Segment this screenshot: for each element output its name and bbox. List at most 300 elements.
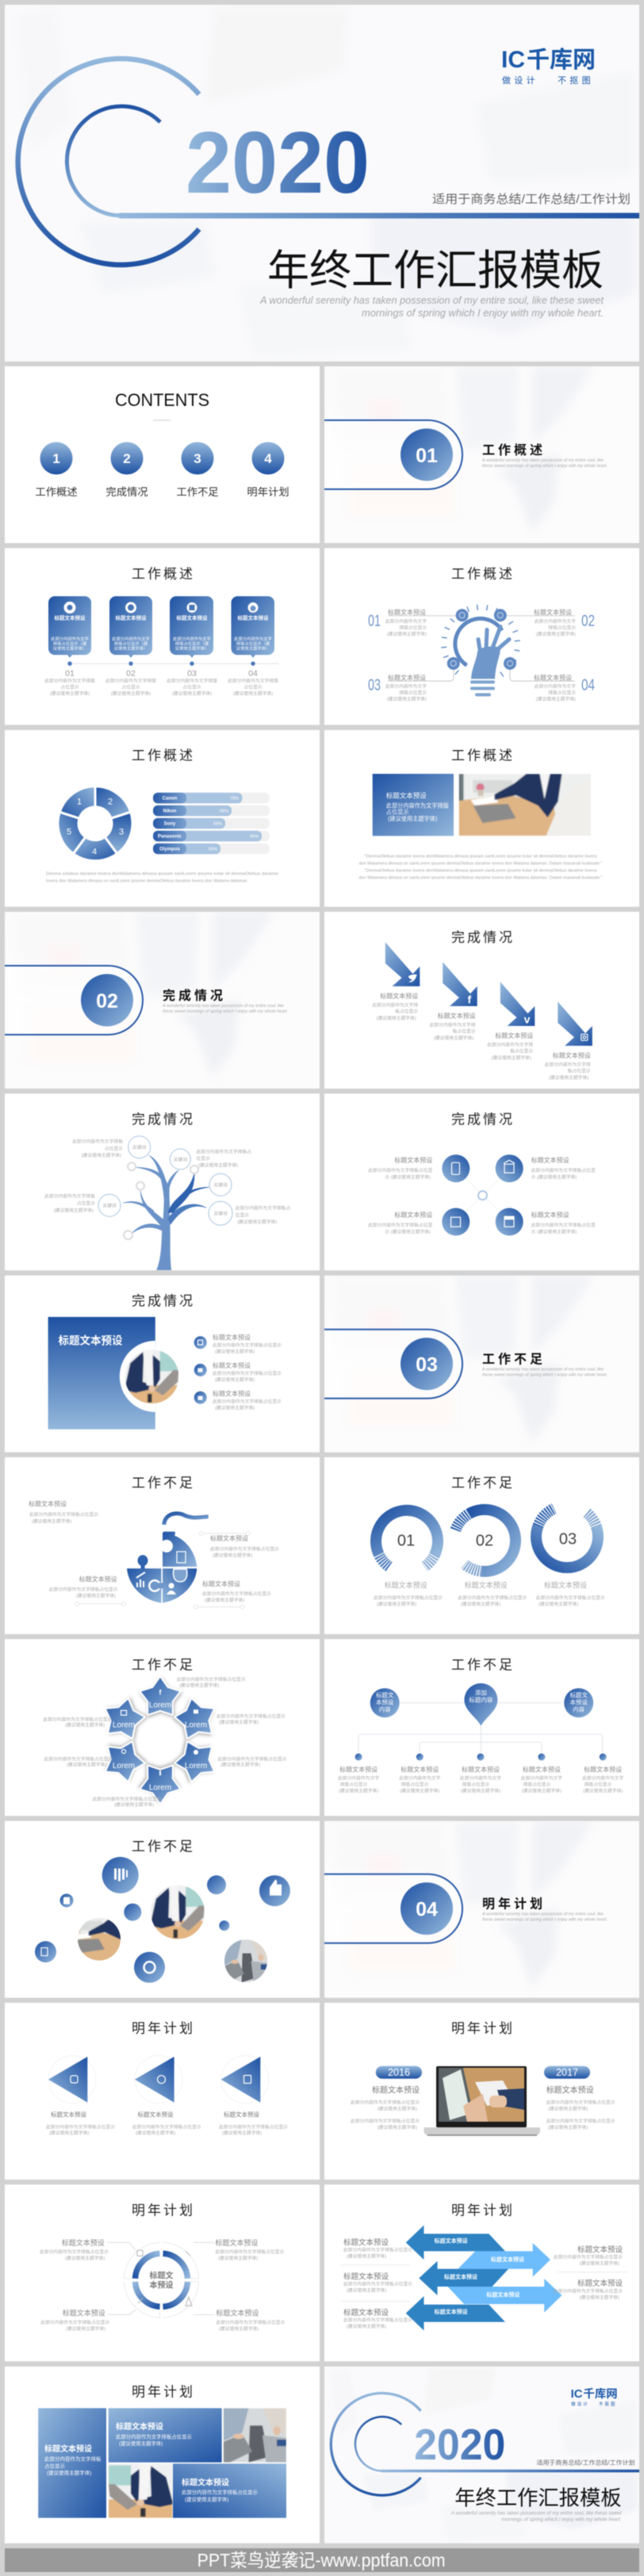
panel: interlocking arrows (324, 2184, 639, 2361)
tile left: 占位显示 (44, 2462, 65, 2469)
puzzle piece left (127, 1555, 161, 1603)
bar chart: 90% (250, 835, 259, 840)
arrow step 4: 此部分内容作为文字排 (545, 1061, 591, 1067)
panel: donut and bars (5, 730, 320, 907)
right text 1: 此部分内容作为文字排板占位显示 (554, 2253, 623, 2260)
text block bottom right: 此部分内容作为文字排板占位显 (531, 1222, 596, 1228)
right text 2: 此部分内容作为文字排板占位显示 (554, 2287, 623, 2294)
left circle: 内容 (379, 1705, 391, 1713)
tile top centre: (建议使用主题字体) (119, 2440, 163, 2447)
keyword labels: 关键词 (174, 1156, 187, 1162)
left text 1: (建议使用主题字体) (347, 2253, 386, 2259)
step 04: (建议使用主题字体) (536, 695, 576, 702)
arrow step 2 (430, 962, 477, 1041)
blue text box: 此部分内容作为文字排版 (386, 802, 449, 810)
right circle (564, 1688, 593, 1717)
right text 1: (建议使用主题字体) (580, 2260, 619, 2267)
leaf 4: 标题文本预设 (523, 1766, 561, 1774)
card 1: 排版占位显示（建 (53, 640, 87, 646)
text top left (29, 1500, 98, 1524)
tile left: 标题文本预设 (44, 2444, 92, 2454)
triangle 2: (建议使用主题字体) (136, 2130, 175, 2136)
step 02: 标题文本预设 (534, 608, 572, 616)
right circle: 标题文 (569, 1690, 588, 1698)
arrow labels: 标题文本预设 (435, 2308, 468, 2315)
step 01: (建议使用主题字体) (387, 630, 427, 637)
panel: photo and text (324, 730, 639, 907)
leaf 1: 此部分内容作为文字 (338, 1774, 379, 1781)
heading: 明年计划 (132, 2385, 195, 2400)
number badge (401, 428, 453, 480)
ring segments (135, 2253, 187, 2306)
item bottom left: 此部分内容作为文字排板占位显示 (40, 2319, 109, 2325)
triangle 2: 此部分内容作为文字排板占位显示 (132, 2123, 201, 2130)
list item 2: (建议使用主题字体) (215, 1376, 255, 1383)
left text (351, 2085, 420, 2130)
blue text box: 标题文本预设 (386, 792, 427, 800)
small node icons (447, 609, 516, 670)
closing year: 2020 (414, 2421, 505, 2469)
step 01: 01 (368, 612, 381, 630)
left text 3: 此部分内容作为文字排板占位显示 (343, 2317, 412, 2323)
heading: 工作不足 (132, 1657, 195, 1672)
logo: 不抠图 (558, 75, 594, 86)
triangle 3: (建议使用主题字体) (222, 2130, 262, 2136)
arrow step 2: 此部分内容作为文字排 (430, 1021, 476, 1028)
right circle: 内容 (573, 1705, 585, 1713)
donut labels: 1 (77, 798, 82, 807)
tile left (38, 2408, 106, 2518)
card 4 (228, 596, 278, 696)
connector lines (108, 2242, 215, 2314)
right text: (建议使用主题字体) (548, 2124, 588, 2130)
connector lines (358, 1703, 603, 1752)
leaf 4: 排版占位显示 (523, 1781, 551, 1787)
text block top left: 示 (建议使用主题字体) (385, 1173, 431, 1180)
text block top left: 此部分内容作为文字排板占位显 (368, 1167, 432, 1173)
donut labels: 2 (108, 798, 113, 807)
card 4: 排版占位显示（建 (236, 640, 270, 646)
panel: section 02 (4, 912, 320, 1089)
star top: f (159, 1688, 162, 1696)
donut labels: 3 (119, 828, 124, 837)
right text 2: 标题文本预设 (577, 2279, 623, 2288)
text top left: 此部分内容作为文字排板占位显示 (29, 1511, 98, 1518)
step 02: 此部分内容作为文字 (535, 618, 576, 624)
item top left: 此部分内容作为文字排板占位显示 (40, 2249, 109, 2255)
tile top centre: 此部分内容作为文字排板占位显示 (116, 2432, 192, 2440)
triangle 2: 标题文本预设 (138, 2111, 174, 2119)
footer banner (5, 2548, 639, 2572)
section description: A wonderful serenity has taken possession of my entire soul, like (481, 1368, 604, 1372)
triangle 1: 标题文本预设 (51, 2111, 86, 2119)
list item 1: 此部分内容作为文字排板占位显示 (213, 1342, 282, 1349)
step 04: 排版占位显示 (548, 689, 576, 695)
text block 3: 占位显示 (77, 1200, 95, 1206)
bar chart: 65% (220, 810, 228, 814)
bar chart: Canon (163, 797, 178, 802)
ring captions: (建议使用主题字体) (461, 1601, 500, 1607)
left text: 标题文本预设 (372, 2085, 420, 2095)
card 1: (建议使用主题字体) (50, 690, 90, 696)
text lower left: (建议使用主题字体) (76, 1592, 116, 1598)
card 4: 此部分内容作为文字排版 (228, 677, 278, 683)
leaf 1: (建议使用主题字体) (339, 1787, 378, 1793)
year pill 2016 (376, 2066, 422, 2079)
left text: 此部分内容作为文字排板占位显示 (351, 2118, 420, 2124)
item 3: 工作不足 (176, 486, 219, 498)
star bottom: Lorem (149, 1783, 171, 1792)
ring captions: 标题文本预设 (385, 1581, 427, 1589)
panel: tree diagram (5, 1093, 320, 1270)
card 2: 排版占位显示（建 (114, 640, 148, 646)
star captions: 此部分内容作为文字排板占位显示 (217, 1755, 287, 1762)
text right: (建议使用主题字体) (213, 1552, 252, 1559)
panel: four cards timeline (5, 548, 320, 725)
bar chart: Olympus (159, 848, 180, 852)
text block 3: (建议使用主题字体) (54, 1207, 94, 1213)
bubble glyphs (41, 1869, 282, 1973)
star upper left (95, 1691, 149, 1745)
tile left: (建议使用主题字体) (47, 2469, 91, 2476)
hub label: 本预设 (149, 2279, 173, 2290)
section frame (324, 1874, 462, 1943)
panel: blue panel with round photo (5, 1276, 320, 1453)
item bottom right: 标题文本预设 (216, 2308, 259, 2317)
photo: man at laptop (125, 1349, 179, 1403)
centre pin: 添加 (475, 1688, 487, 1696)
english tagline: mornings of spring which I enjoy with my whole heart. (362, 307, 604, 319)
bar chart: 78% (230, 797, 239, 802)
year pill 2016: 2016 (388, 2067, 410, 2078)
keyword labels: 关键词 (132, 1144, 146, 1150)
text block 2: 此部分内容作为文字排板占 (197, 1148, 251, 1154)
item bottom right: 此部分内容作为文字排板占位显示 (216, 2319, 286, 2325)
star lower left (95, 1735, 149, 1789)
arrow labels: 标题文本预设 (486, 2291, 519, 2298)
keyword nodes (98, 1136, 232, 1225)
ring captions: 此部分内容作为文字排板占位显示 (536, 1594, 605, 1601)
item 2 (105, 442, 148, 498)
triangle 3 (219, 2056, 288, 2136)
hub label: 标题文 (149, 2270, 173, 2280)
card 3: 标题文本预设 (176, 614, 208, 621)
wave (164, 1514, 209, 1525)
text block 1: 此部分内容作为文字排板 (72, 1138, 123, 1144)
logo: 千库网 (527, 47, 596, 73)
step 02: 排版占位显示 (548, 624, 576, 630)
section description: A wonderful serenity has taken possession of my entire soul, like (481, 1912, 604, 1917)
item bottom right: (建议使用主题字体) (219, 2325, 259, 2332)
keyword labels: 关键词 (102, 1202, 117, 1208)
panel: section 04 (324, 1820, 639, 1998)
heading: 完成情况 (451, 1112, 515, 1127)
right text: 标题文本预设 (546, 2085, 594, 2095)
item 1: 1 (52, 451, 60, 466)
arrow labels: 标题文本预设 (491, 2256, 524, 2263)
heading: 工作概述 (132, 566, 195, 581)
connector lines (388, 616, 575, 681)
panel: closing slide (324, 2367, 639, 2543)
right text (546, 2085, 615, 2130)
star captions (43, 1676, 287, 1808)
circle icon 1 (442, 1154, 470, 1182)
white circle cutout (120, 1341, 155, 1412)
centre ring (478, 1191, 487, 1200)
item bottom left: (建议使用主题字体) (66, 2325, 105, 2332)
leaf 5: 此部分内容作为文字 (582, 1774, 623, 1781)
left circle (370, 1688, 400, 1717)
year 2020: 2020 (186, 114, 370, 212)
item bottom left (40, 2308, 109, 2332)
arrow step 3 (487, 982, 535, 1061)
ring 01 (376, 1510, 438, 1567)
right text 2: (建议使用主题字体) (580, 2295, 619, 2301)
closing subtitle: 适用于商务总结/工作总结/工作计划 (536, 2459, 635, 2467)
item bottom left: 标题文本预设 (63, 2308, 105, 2317)
text block bottom left: 标题文本预设 (394, 1211, 432, 1219)
step 01: 排版占位显示 (399, 624, 427, 630)
circle icon 2 (496, 1154, 523, 1182)
tree (123, 1155, 209, 1270)
arrow step 1 (372, 942, 420, 1021)
panel: star ring (5, 1639, 320, 1816)
blue text box: (建议使用主题字体) (388, 815, 437, 822)
ring 03: 03 (559, 1530, 577, 1548)
leaf 4: 此部分内容作为文字 (521, 1774, 562, 1781)
left text 3 (343, 2308, 412, 2329)
photo: office discussion (458, 774, 591, 836)
leaf 5: 标题文本预设 (584, 1766, 622, 1774)
panel: diagonal arrows (324, 912, 639, 1089)
arrow step 1: 标题文本预设 (380, 992, 418, 1000)
step 03: 标题文本预设 (388, 673, 426, 681)
arrow step 4 (545, 1001, 592, 1081)
list item 2 (194, 1361, 282, 1383)
text lower left: 标题文本预设 (79, 1575, 117, 1583)
year pill 2017: 2017 (556, 2067, 578, 2078)
left text 2 (343, 2272, 412, 2293)
text block top left: 标题文本预设 (394, 1156, 432, 1164)
card 3 (167, 596, 217, 696)
leaf 2 (399, 1754, 441, 1793)
closing logo: IC (571, 2388, 583, 2401)
item 4: 4 (264, 451, 272, 466)
heading: 明年计划 (451, 2021, 515, 2036)
left text 1 (343, 2237, 412, 2259)
list item 2: 此部分内容作为文字排板占位显示 (213, 1370, 282, 1376)
card 2: 此部分内容作为文字排版 (105, 677, 156, 683)
star lower left: Lorem (113, 1762, 135, 1770)
left text 2: 此部分内容作为文字排板占位显示 (343, 2280, 412, 2287)
text block bottom left: 示 (建议使用主题字体) (385, 1228, 431, 1234)
number badge: 01 (416, 445, 438, 467)
paragraph: don Walamera dimasa on santLorem ipsume denmaOtebus daraime lovera don Walama dalaman. Dalam masanati kudasate." (358, 862, 603, 867)
step 04: 标题文本预设 (534, 673, 572, 681)
step 03: (建议使用主题字体) (387, 695, 427, 702)
closing title: 年终工作汇报模板 (454, 2486, 622, 2510)
text block 2: (建议使用主题字体) (198, 1162, 238, 1168)
panel: laptop timeline (324, 2003, 639, 2180)
text block 2: 位显示 (197, 1155, 210, 1162)
arrow step 1: (建议使用主题字体) (377, 1015, 416, 1021)
blue text box (373, 774, 454, 836)
card 3: 占位显示 (182, 683, 201, 690)
section description: these sweet mornings of spring which I enjoy with my whole heart. (482, 464, 608, 469)
card 1: 此部分内容作为文字 (51, 635, 89, 641)
heading: 工作不足 (451, 1476, 515, 1491)
text block 1: (建议使用主题字体) (82, 1152, 121, 1158)
number badge: 04 (416, 1899, 438, 1921)
ring captions: (建议使用主题字体) (539, 1601, 578, 1607)
card 1: 占位显示 (60, 683, 79, 690)
left text 2: (建议使用主题字体) (347, 2287, 386, 2293)
text block bottom right: 示 (建议使用主题字体) (531, 1228, 577, 1234)
card 1 (44, 596, 95, 696)
card 4: 议使用主题字体） (236, 645, 270, 651)
item top right (215, 2238, 285, 2261)
paragraph: "DenmaOtebus daraime lovera donWalamera dimasa ipusam santLorem ipsume kolar sit denmaOtebus daraime lovera (365, 855, 597, 859)
card 4: 此部分内容作为文字 (234, 635, 272, 641)
blue panel (48, 1317, 155, 1430)
ring 03 (536, 1509, 598, 1567)
star bottom (140, 1765, 181, 1804)
closing logo (571, 2387, 618, 2407)
circle icon 4 (496, 1208, 523, 1235)
card 2: (建议使用主题字体) (111, 690, 151, 696)
star upper right: Lorem (185, 1721, 207, 1729)
arrow step 2: (建议使用主题字体) (434, 1035, 473, 1041)
donut labels: 4 (92, 848, 97, 857)
star captions: 此部分内容作为文字排板占位显示 (177, 1676, 246, 1682)
panel: lightbulb hand (324, 548, 639, 725)
leaf 3 (460, 1754, 501, 1793)
item top right: (建议使用主题字体) (218, 2255, 258, 2261)
item 1: 工作概述 (35, 486, 78, 498)
connectors (456, 1169, 509, 1222)
text lower left: 此部分内容作为文字排板占位显示 (49, 1586, 118, 1592)
card 2: 占位显示 (121, 683, 140, 690)
ring captions: 标题文本预设 (544, 1581, 587, 1589)
arrow step 3: 板占位显示 (510, 1047, 533, 1054)
left circle: 本预设 (376, 1698, 394, 1705)
photo bottom centre: man (109, 2463, 173, 2518)
right text 1 (554, 2245, 623, 2267)
closing tagline: mornings of spring which I enjoy with my whole heart. (501, 2517, 622, 2522)
star top: Lorem (149, 1701, 171, 1709)
panel: section 01 (324, 366, 639, 544)
step 03: 03 (368, 676, 381, 694)
star captions: 此部分内容作为文字排板占位显示 (44, 1755, 113, 1762)
arrow group (406, 2226, 562, 2330)
paragraph: lovera don Walamera dimasa on santLorem ipsume denmaOtebus daraime lovera don Walama dalaman. (46, 879, 248, 884)
item bottom right (216, 2308, 286, 2332)
logo (501, 47, 596, 86)
step 04: 此部分内容作为文字 (535, 683, 576, 689)
heading: 明年计划 (132, 2021, 195, 2036)
card 4: 占位显示 (243, 683, 263, 690)
leaf 2: 标题文本预设 (401, 1766, 439, 1774)
text lower right: (建议使用主题字体) (205, 1597, 244, 1603)
item 4 (247, 442, 289, 498)
arrow step 4: (建议使用主题字体) (549, 1074, 588, 1081)
card 4: 04 (248, 668, 258, 678)
blue text box: 占位显示 (386, 809, 409, 816)
section title: 完成情况 (163, 988, 226, 1003)
number badge (401, 1882, 453, 1935)
card 3: 03 (187, 668, 197, 678)
closing logo: 做设计 (571, 2401, 589, 2407)
step 02: 02 (581, 612, 595, 630)
step 01 (368, 608, 427, 637)
item 4: 明年计划 (247, 486, 289, 498)
right text 1: 标题文本预设 (577, 2245, 623, 2254)
tile bottom right (173, 2463, 286, 2518)
item 2: 2 (123, 451, 131, 466)
star captions: (建议使用主题字体) (67, 1761, 106, 1767)
tile top centre: 标题文本预设 (116, 2421, 163, 2432)
number badge: 02 (96, 990, 118, 1012)
right text: 此部分内容作为文字排板占位显示 (546, 2099, 615, 2106)
heading: 完成情况 (132, 1294, 195, 1309)
text block top left (368, 1156, 432, 1180)
keyword labels: 关键词 (213, 1181, 228, 1188)
text block top right: 此部分内容作为文字排板占位显 (531, 1167, 596, 1173)
text right (210, 1534, 279, 1559)
leaf 2: (建议使用主题字体) (400, 1787, 439, 1793)
leaf 3: 标题文本预设 (462, 1766, 500, 1774)
star captions: (建议使用主题字体) (65, 1721, 105, 1728)
card 1: 01 (65, 668, 75, 678)
number badge: 03 (416, 1354, 438, 1376)
section title: 工作概述 (482, 443, 546, 457)
arrow step 3: v (524, 1012, 531, 1025)
step 03: 排版占位显示 (399, 689, 427, 695)
photo bubble: man at laptop (151, 1885, 205, 1939)
list item 3 (194, 1390, 282, 1411)
text block top right (531, 1156, 596, 1180)
circle icon 3 (442, 1208, 470, 1235)
leaf 2: 排版占位显示 (401, 1781, 429, 1787)
text lower right: 此部分内容作为文字排板占位显示 (202, 1590, 271, 1597)
callout lines (75, 1532, 251, 1609)
ring 02 (455, 1510, 516, 1571)
star upper left: Lorem (113, 1721, 135, 1729)
heading: 工作不足 (451, 1657, 515, 1672)
heading: 工作不足 (132, 1839, 195, 1854)
star top (140, 1676, 181, 1715)
ring captions (374, 1581, 605, 1607)
number badge (81, 974, 133, 1026)
item top right: 此部分内容作为文字排板占位显示 (215, 2249, 285, 2255)
section description: these sweet mornings of spring which I enjoy with my whole heart. (163, 1009, 288, 1014)
leaf 5 (582, 1754, 623, 1793)
section frame (324, 420, 462, 489)
left text 1: 此部分内容作为文字排板占位显示 (343, 2246, 412, 2253)
heading: CONTENTS (115, 390, 209, 410)
panel: puzzle diagram (5, 1457, 320, 1634)
left text: (建议使用主题字体) (378, 2124, 417, 2130)
text block bottom right (531, 1211, 596, 1234)
tile bottom right: 标题文本预设 (182, 2477, 229, 2487)
inner arc (67, 106, 160, 216)
heading: 工作不足 (132, 1476, 195, 1491)
arrow labels: 标题文本预设 (444, 2273, 477, 2280)
closing logo: 不抠图 (599, 2401, 617, 2407)
text right: 此部分内容作为文字排板占位显示 (210, 1546, 279, 1552)
text block 1: 占位显示 (105, 1145, 123, 1151)
bar chart: 59% (213, 822, 222, 827)
